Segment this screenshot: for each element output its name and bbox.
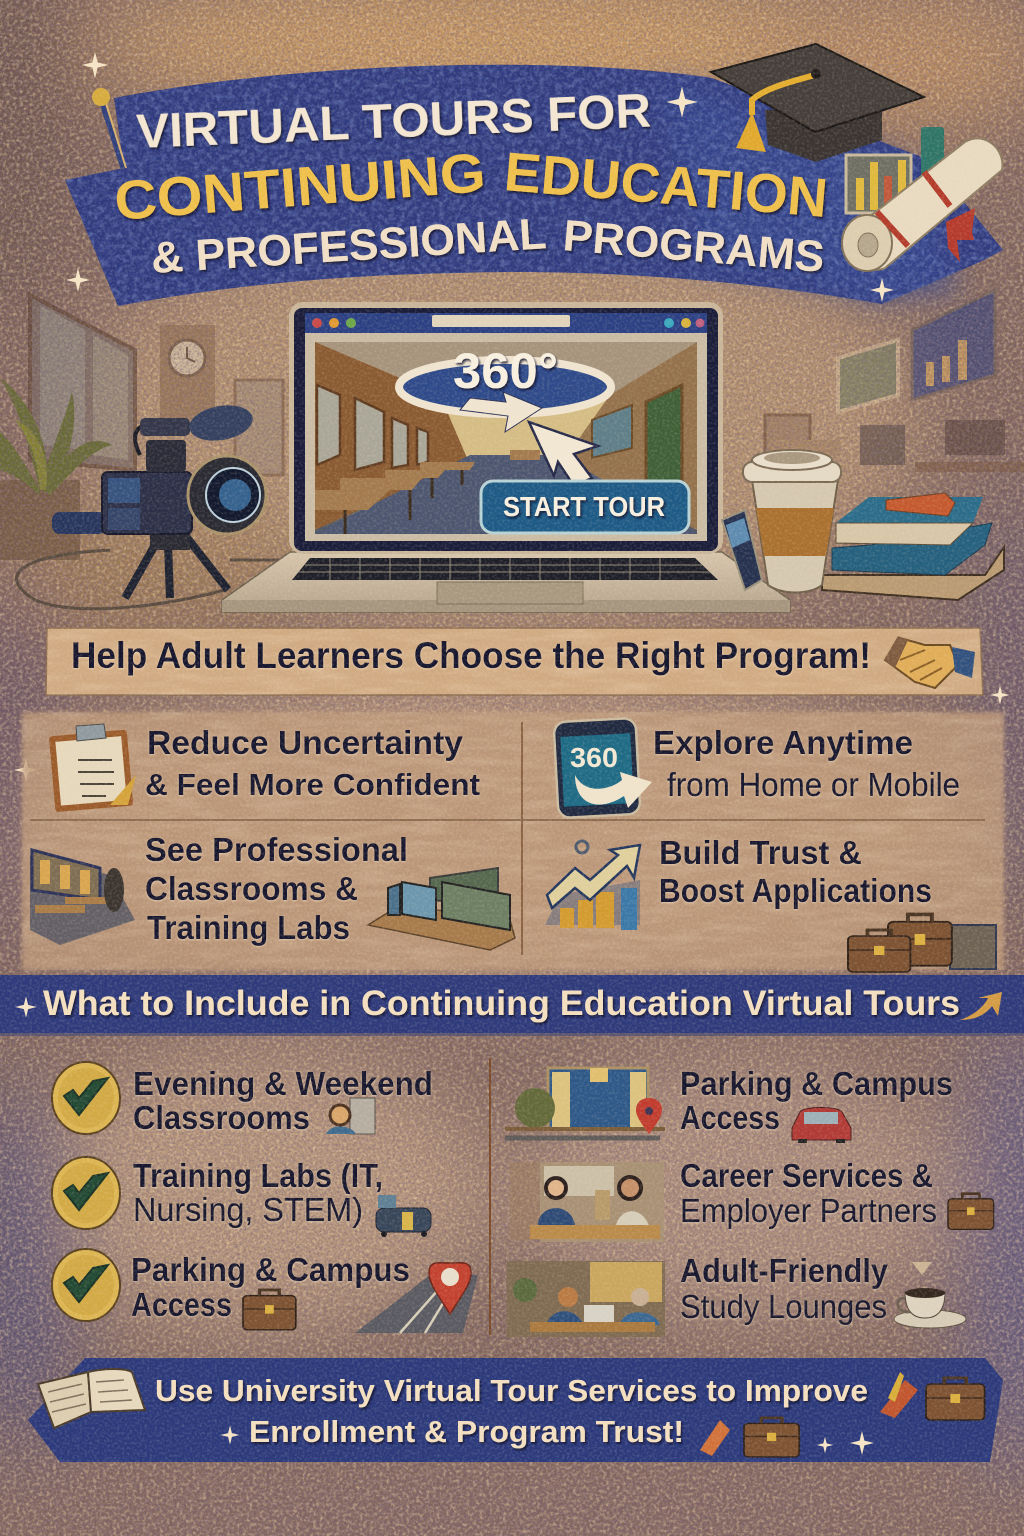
footer banner — [28, 1358, 1003, 1462]
icon: computer lab — [368, 868, 515, 950]
help banner — [46, 628, 983, 695]
benefit: build trust: Boost Applications — [659, 872, 932, 909]
icon: student at computer — [326, 1098, 375, 1134]
benefit: reduce uncertainty: & Feel More Confident — [145, 767, 480, 802]
benefit: see professional classrooms — [30, 831, 515, 950]
icon: building and pin — [505, 1068, 665, 1138]
icon: chart and books — [846, 127, 944, 213]
icon: bag — [243, 1290, 296, 1330]
cursor arrow — [529, 422, 598, 486]
icon: coffee cup — [743, 450, 841, 592]
icon: red car — [792, 1108, 851, 1143]
title line 3: & PROFESSIONAL — [150, 209, 548, 283]
icon: map pin on road — [355, 1263, 478, 1333]
item: campus building: Access — [680, 1099, 780, 1136]
title line 2: CONTINUING — [112, 141, 488, 232]
icon: pencils and briefcase — [880, 1372, 985, 1420]
browser bar — [305, 313, 707, 333]
item: career services: Career Services & — [680, 1157, 933, 1194]
icon: calculator — [722, 510, 762, 590]
icon: growth arrow chart — [545, 841, 640, 930]
item: training labs — [52, 1157, 431, 1237]
title line 1: VIRTUAL TOURS FOR — [135, 84, 652, 159]
keyboard — [292, 558, 718, 580]
item: campus building — [505, 1065, 953, 1143]
laptop base — [222, 552, 790, 612]
title line 2: EDUCATION — [502, 140, 830, 229]
small book — [886, 493, 955, 516]
item: evening classrooms: Evening & Weekend — [133, 1065, 433, 1102]
bottom book — [822, 547, 1004, 600]
wall clock — [160, 325, 215, 420]
classroom board — [646, 385, 682, 505]
illustration: advisor meeting — [510, 1162, 664, 1242]
item: career services — [510, 1157, 994, 1242]
benefit: explore anytime: Explore Anytime — [653, 724, 913, 761]
icon: briefcases — [848, 914, 996, 972]
top book — [836, 497, 983, 523]
item: parking access: Access — [131, 1286, 232, 1323]
right desks — [770, 420, 1024, 472]
help banner text: Help Adult Learners Choose the Right Program! — [71, 635, 871, 676]
item: campus building: Parking & Campus — [680, 1065, 953, 1102]
item: evening classrooms: Classrooms — [133, 1099, 310, 1136]
benefit: explore anytime — [554, 718, 960, 818]
benefits panel — [22, 712, 1004, 972]
illustration: study lounge — [507, 1261, 665, 1337]
icon: video camera — [17, 401, 290, 609]
icon: open book — [38, 1369, 145, 1428]
benefit: explore anytime: from Home or Mobile — [667, 766, 960, 803]
checklist panel — [52, 1058, 994, 1337]
laptop — [222, 302, 790, 612]
icon: pencils and case, second line — [700, 1418, 799, 1457]
left windows — [30, 295, 283, 475]
item: career services: Employer Partners — [680, 1192, 937, 1229]
footer banner: Enrollment & Program Trust! — [249, 1414, 684, 1449]
sparkle — [15, 996, 37, 1018]
flag pole — [92, 88, 126, 168]
trackpad — [437, 582, 583, 604]
sparkles — [220, 1425, 874, 1455]
360 badge — [399, 343, 611, 432]
item: study lounges: Study Lounges — [680, 1288, 887, 1325]
benefit: see professional classrooms: Training Labs — [147, 909, 350, 946]
background room scene — [30, 290, 1024, 475]
360 badge: 360° — [453, 343, 558, 399]
footer text: Use University Virtual Tour Services to Improve — [155, 1373, 868, 1408]
sparkles — [14, 52, 1010, 782]
tripod — [125, 535, 228, 598]
wall chart — [912, 290, 995, 400]
benefit: reduce uncertainty — [49, 724, 480, 812]
title line 3 — [150, 209, 826, 283]
benefit: see professional classrooms: See Professional — [145, 831, 408, 868]
title line 2 — [112, 140, 830, 232]
item: study lounges: Adult-Friendly — [680, 1252, 889, 1289]
classroom desks — [315, 450, 540, 510]
benefit: build trust: Build Trust & — [659, 834, 862, 871]
browser content frame — [305, 333, 707, 541]
item: parking access: Parking & Campus — [131, 1251, 410, 1288]
item: parking access — [52, 1249, 478, 1333]
band heading: What to Include in Continuing Education Virtual Tours — [43, 984, 960, 1023]
icon: graduation cap — [711, 44, 924, 162]
icon: clipboard — [49, 724, 136, 812]
start tour button — [481, 481, 689, 533]
title banner — [60, 50, 1010, 310]
item: study lounges — [507, 1252, 966, 1337]
panel streaks — [22, 712, 1004, 970]
banner mottling — [60, 50, 1010, 310]
icon: gold arrow — [960, 992, 1002, 1020]
decorative plant — [0, 378, 112, 560]
icon: diploma scroll — [842, 138, 1002, 271]
banner ribbon — [65, 65, 1003, 306]
icon: briefcase — [948, 1194, 994, 1229]
benefit: build trust — [545, 834, 996, 972]
title line 3: PROGRAMS — [561, 211, 826, 282]
icon: phone with 360 — [554, 718, 652, 818]
middle book — [832, 523, 992, 575]
icon: coffee cup and saucer — [894, 1262, 966, 1328]
item: training labs: Training Labs (IT, — [133, 1157, 383, 1194]
start tour button: START TOUR — [503, 491, 665, 522]
benefit: reduce uncertainty: Reduce Uncertainty — [147, 724, 464, 761]
icon: lab cart — [376, 1195, 431, 1237]
right wall art — [765, 340, 898, 475]
benefit: see professional classrooms: Classrooms & — [145, 870, 358, 907]
classroom windows — [317, 385, 428, 470]
icon: classroom scene — [30, 850, 135, 945]
icon: phone with 360: 360 — [570, 742, 618, 773]
icon: handshake — [884, 636, 975, 688]
icon: book stack — [822, 493, 1004, 600]
item: evening classrooms — [52, 1062, 433, 1136]
banner streaks — [47, 629, 981, 695]
item: training labs: Nursing, STEM) — [133, 1191, 363, 1228]
classroom photo — [315, 342, 697, 534]
screen bezel — [289, 302, 723, 554]
include section band — [0, 975, 1024, 1036]
